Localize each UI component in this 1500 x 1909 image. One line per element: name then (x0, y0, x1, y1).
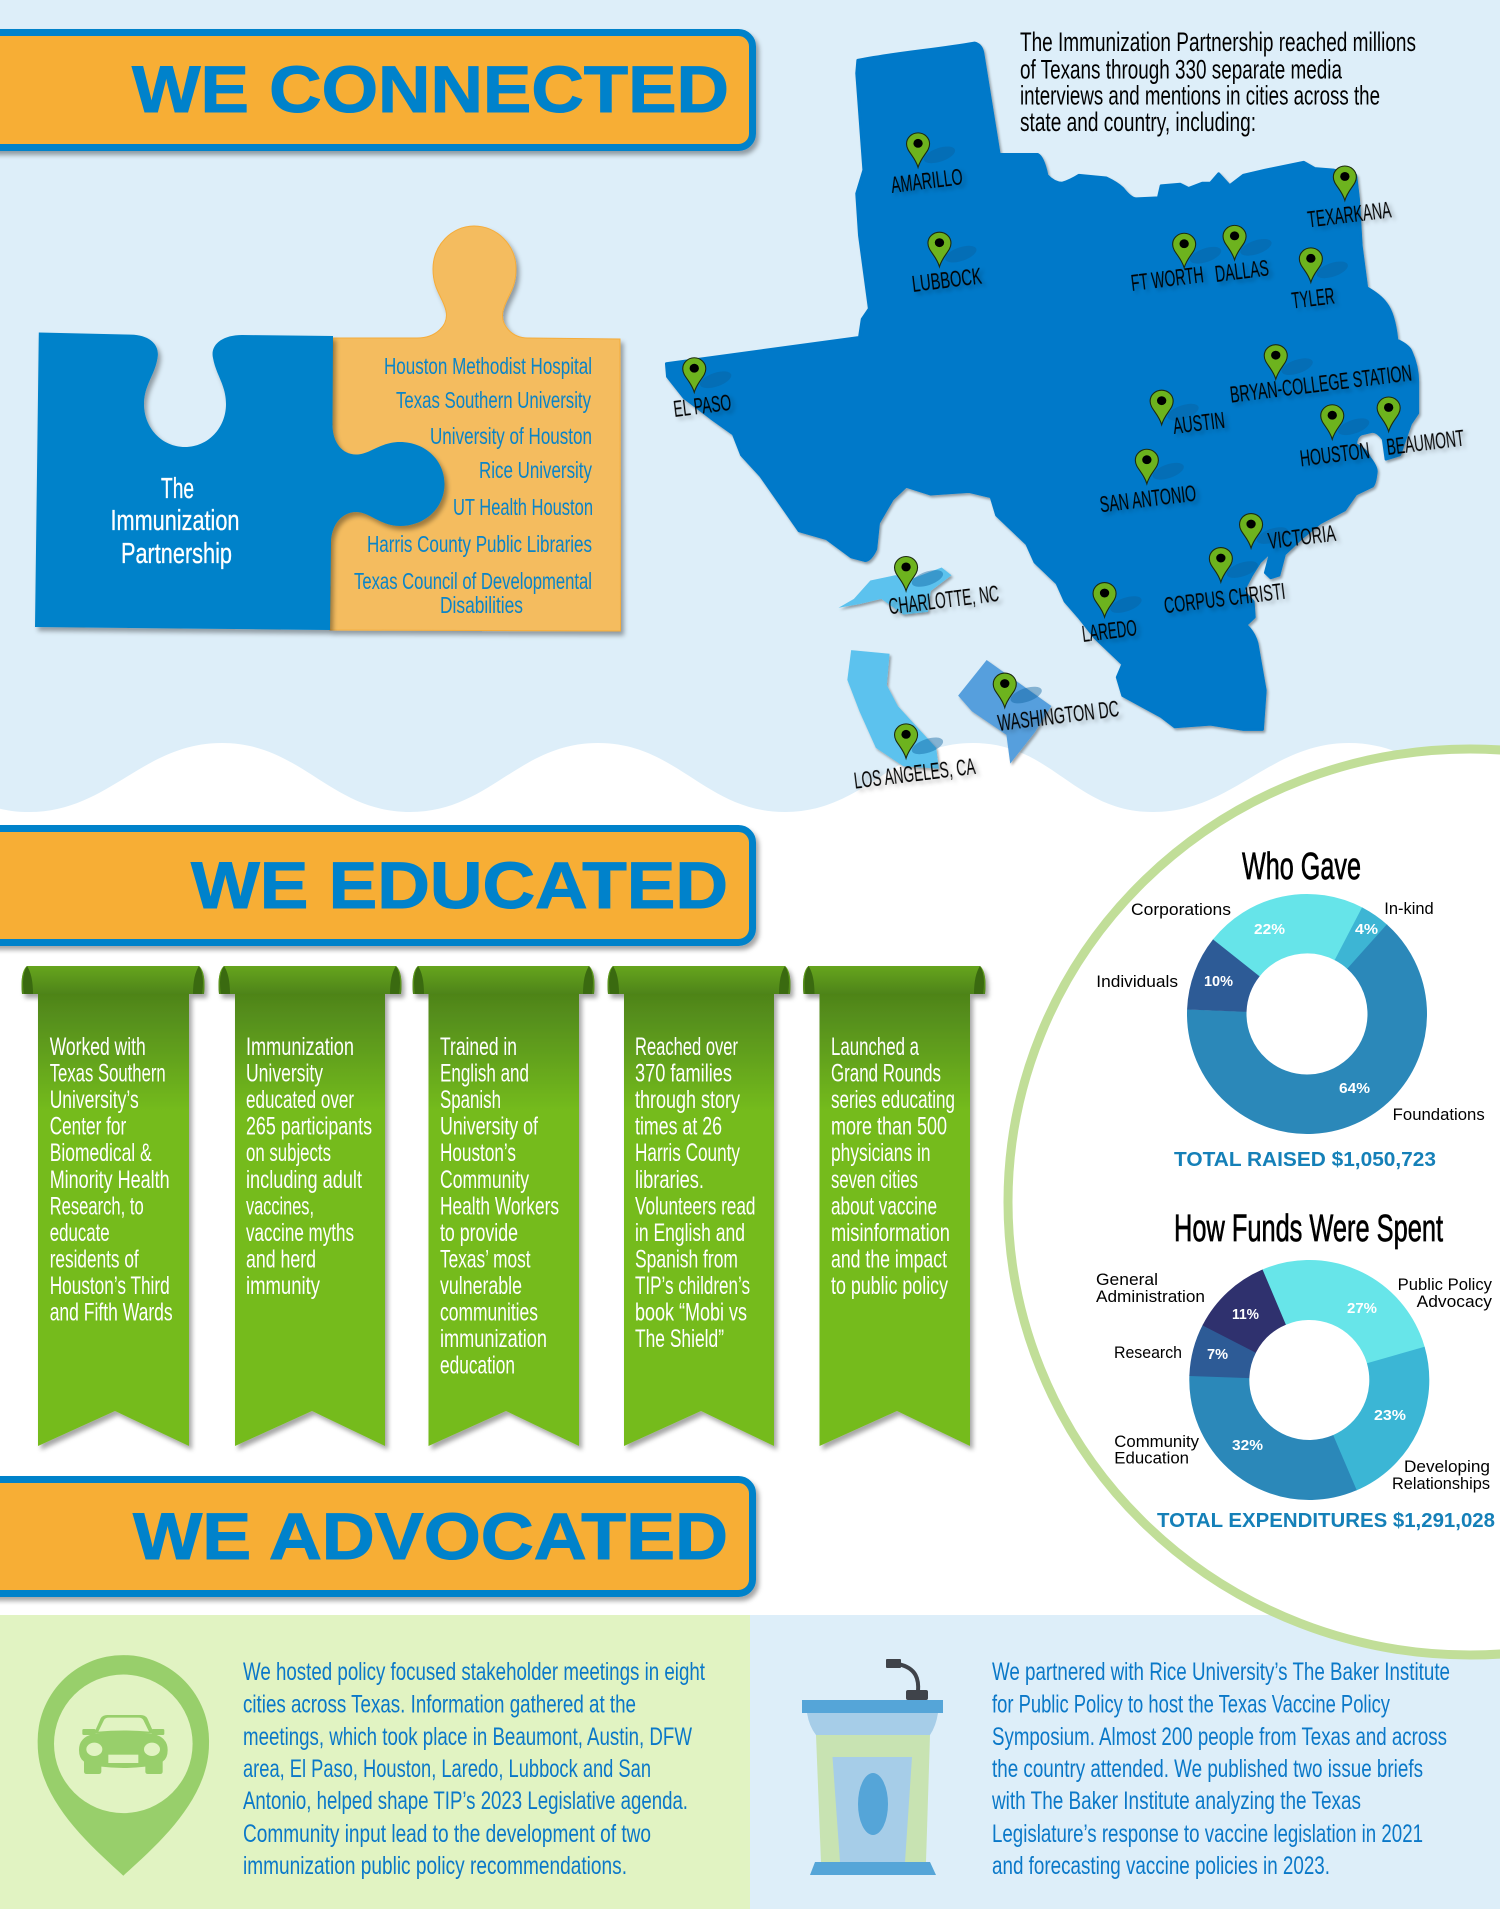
ribbon 3: Texas’ most (440, 1245, 531, 1273)
ribbon 4: 370 families (635, 1060, 732, 1088)
puzzle piece: the immunization partnership (35, 332, 444, 630)
total raised: TOTAL RAISED $1,050,723 (1174, 1148, 1436, 1171)
ribbon 3 (413, 966, 594, 1446)
ribbon 2: including adult (246, 1166, 362, 1194)
slice labels: General (1096, 1271, 1158, 1289)
partner list: Disabilities (440, 592, 523, 618)
chart title: Who Gave (1242, 846, 1361, 888)
ribbon 3: Houston’s (440, 1139, 516, 1167)
intro text: state and country, including: (1020, 107, 1256, 137)
slice labels: In-kind (1384, 900, 1434, 918)
city pin: austin: AUSTIN (1171, 407, 1226, 439)
ribbon 2 (219, 966, 401, 1446)
donut chart (1180, 887, 1434, 1141)
panel: advocated right background (750, 1615, 1500, 1909)
slice labels: Community (1114, 1433, 1200, 1451)
intro text (1020, 27, 1416, 137)
donut chart (1188, 1259, 1431, 1501)
ribbon 3: vulnerable (440, 1272, 522, 1300)
ribbon 5: misinformation (831, 1219, 950, 1247)
map: washington dc region (958, 660, 1051, 764)
city pin: ft worth: FT WORTH (1129, 261, 1205, 296)
city pin: lubbock: LUBBOCK (910, 263, 983, 297)
text: stakeholder meetings: Community input lead to the development of two (243, 1820, 651, 1848)
text: stakeholder meetings: cities across Texas. Information gathered at the (243, 1691, 636, 1719)
city pin: houston (1298, 405, 1372, 471)
ribbon 1: and Fifth Wards (50, 1298, 173, 1326)
text: stakeholder meetings (243, 1658, 705, 1880)
ribbon 3: Community (440, 1166, 529, 1194)
ribbon 5: series educating (831, 1086, 955, 1114)
slice labels: Developing (1404, 1458, 1490, 1476)
ribbon 2: immunity (246, 1272, 320, 1300)
slice labels: 32% (1232, 1437, 1263, 1454)
partner list: Houston Methodist Hospital (384, 353, 592, 379)
city pin: laredo (1080, 583, 1144, 647)
white wave section (0, 743, 1500, 1620)
slice labels: Administration (1096, 1288, 1205, 1306)
slice labels: 23% (1374, 1407, 1406, 1424)
ribbon 4: book “Mobi vs (635, 1298, 747, 1326)
ribbon 4: The Shield” (635, 1325, 724, 1353)
city pin: ft worth (1129, 233, 1223, 296)
slice labels (1096, 900, 1485, 1124)
slice labels: 4% (1355, 921, 1378, 938)
city pin: austin (1150, 390, 1226, 439)
ribbon 3: Spanish (440, 1086, 501, 1114)
total expenditures: TOTAL EXPENDITURES $1,291,028 (1157, 1509, 1495, 1532)
ribbon 4: Reached over (635, 1033, 738, 1061)
city pin: tyler: TYLER (1290, 283, 1336, 314)
partner list: Rice University (479, 457, 592, 483)
partner list: Texas Southern University (396, 387, 591, 413)
map: california (847, 650, 939, 769)
city pin: el paso (672, 358, 734, 422)
ribbon 5: Grand Rounds (831, 1060, 941, 1088)
puzzle label: Partnership (121, 538, 232, 570)
city pin: beaumont (1377, 397, 1466, 460)
city pin: los angeles ca (852, 724, 977, 794)
partner list: Harris County Public Libraries (367, 531, 592, 557)
heading: we connected: WE CONNECTED (132, 52, 729, 126)
slice labels: Advocacy (1417, 1293, 1493, 1311)
text: baker institute partnership: with The Baker Institute analyzing the Texas (991, 1787, 1361, 1815)
ribbon 3: English and (440, 1060, 529, 1088)
ribbon 2: on subjects (246, 1139, 331, 1167)
text: stakeholder meetings: meetings, which took place in Beaumont, Austin, DFW (243, 1723, 692, 1751)
partner list: UT Health Houston (453, 494, 593, 520)
text: stakeholder meetings: Antonio, helped shape TIP’s 2023 Legislative agenda. (243, 1787, 688, 1815)
slice labels: Education (1114, 1450, 1189, 1468)
city pin: corpus christi: CORPUS CHRISTI (1162, 578, 1287, 618)
city pin: san antonio: SAN ANTONIO (1098, 480, 1198, 517)
heading: we advocated: WE ADVOCATED (133, 1499, 728, 1573)
city pin: houston: HOUSTON (1298, 437, 1371, 471)
text: baker institute partnership: and forecasting vaccine policies in 2023. (992, 1852, 1330, 1880)
ribbon 1: Center for (50, 1113, 126, 1141)
icon: podium (802, 1659, 943, 1875)
partner list: Texas Council of Developmental (354, 568, 592, 594)
slice labels: 10% (1204, 973, 1233, 990)
ribbon 5: more than 500 (831, 1113, 947, 1141)
ribbon 5 (803, 966, 985, 1446)
slice labels: Relationships (1392, 1475, 1490, 1493)
city pin: san antonio (1098, 449, 1198, 517)
ribbon 1: Houston’s Third (50, 1272, 170, 1300)
ribbon 1: Worked with (50, 1033, 146, 1061)
heading: we advocated (0, 1480, 752, 1594)
slice labels: Corporations (1131, 901, 1231, 919)
chart: who gave (1096, 846, 1485, 1171)
slice labels: 64% (1339, 1080, 1370, 1097)
ribbon 4: through story (635, 1086, 740, 1114)
ribbon 2: 265 participants (246, 1113, 372, 1141)
icon: location pin with car (38, 1655, 209, 1876)
ribbon 3: Trained in (440, 1033, 517, 1061)
ribbon 3: communities (440, 1298, 538, 1326)
ribbon 2: Immunization (246, 1033, 354, 1061)
ribbon 4: Harris County (635, 1139, 740, 1167)
partner list: University of Houston (430, 423, 592, 449)
city pin: amarillo (889, 133, 964, 198)
city pin: los angeles ca: LOS ANGELES, CA (852, 753, 977, 794)
ribbon 2: educated over (246, 1086, 354, 1114)
map: texas (666, 43, 1418, 730)
slice labels (1096, 1271, 1493, 1493)
intro text: of Texans through 330 separate media (1020, 54, 1343, 84)
ribbon 2: University (246, 1060, 323, 1088)
city pin: charlotte nc (887, 556, 1000, 619)
city pin: dallas: DALLAS (1213, 255, 1270, 287)
ribbon 5: physicians in (831, 1139, 930, 1167)
ribbon 5: Launched a (831, 1033, 919, 1061)
ribbon 3: Health Workers (440, 1192, 559, 1220)
ribbon 4: in English and (635, 1219, 745, 1247)
ribbon 4 (608, 966, 790, 1446)
ribbon 2: vaccines, (246, 1192, 314, 1220)
ribbon 1: Minority Health (50, 1166, 170, 1194)
heading: we educated (0, 828, 752, 942)
ribbon 4: times at 26 (635, 1113, 722, 1141)
ribbon 2: and herd (246, 1245, 316, 1273)
city pin: washington dc: WASHINGTON DC (996, 695, 1120, 736)
city pin: el paso: EL PASO (672, 389, 733, 422)
city pin: washington dc (993, 673, 1120, 736)
chart: how funds were spent (1096, 1208, 1495, 1532)
panel: advocated left background (0, 1615, 750, 1909)
slice labels: 22% (1254, 921, 1285, 938)
ribbon 5: seven cities (831, 1166, 918, 1194)
slice labels: 27% (1347, 1300, 1377, 1317)
ribbon 1: Texas Southern (50, 1060, 166, 1088)
city pin: tyler (1290, 248, 1350, 314)
text: stakeholder meetings: immunization public policy recommendations. (243, 1852, 627, 1880)
puzzle piece: partners (330, 226, 620, 631)
ribbon 3: to provide (440, 1219, 518, 1247)
slice labels: 11% (1232, 1306, 1259, 1323)
ribbon 3: education (440, 1352, 515, 1380)
city pin: texarkana: TEXARKANA (1306, 196, 1393, 232)
puzzle label: Immunization (110, 505, 240, 537)
text: stakeholder meetings: area, El Paso, Houston, Laredo, Lubbock and San (243, 1755, 651, 1783)
ribbon 3: immunization (440, 1325, 547, 1353)
map: north carolina (839, 567, 952, 615)
city pin: laredo: LAREDO (1080, 614, 1138, 647)
ribbon 4: libraries. (635, 1166, 704, 1194)
text: stakeholder meetings: We hosted policy focused stakeholder meetings in eight (243, 1658, 705, 1686)
heading: we connected (0, 32, 752, 148)
city pin: victoria: VICTORIA (1266, 520, 1338, 554)
ribbon 1: Biomedical & (50, 1139, 152, 1167)
panel: finance circle (1008, 749, 1500, 1655)
puzzle graphic (35, 226, 620, 631)
city pin: charlotte nc: CHARLOTTE, NC (887, 580, 1000, 619)
city pin: corpus christi (1162, 548, 1287, 618)
slice labels: Public Policy (1398, 1276, 1493, 1294)
puzzle label: The (161, 473, 194, 505)
ribbon 4: Spanish from (635, 1245, 738, 1273)
ribbon 4: Volunteers read (635, 1192, 756, 1220)
slice labels: Individuals (1096, 973, 1178, 991)
city pin: victoria (1240, 514, 1338, 554)
city pin: lubbock (910, 232, 983, 297)
city pin: amarillo: AMARILLO (889, 163, 964, 198)
ribbon 1: University’s (50, 1086, 139, 1114)
ribbon 1: residents of (50, 1245, 139, 1273)
heading: we educated: WE EDUCATED (191, 848, 728, 922)
ribbon 1: educate (50, 1219, 110, 1247)
partner list (354, 353, 593, 618)
city pin: bryan-college station (1228, 345, 1413, 408)
ribbon 4: TIP’s children’s (635, 1272, 750, 1300)
ribbon 5: about vaccine (831, 1192, 937, 1220)
slice labels: Research (1114, 1344, 1182, 1362)
ribbon 1 (22, 966, 204, 1446)
ribbon 3: University of (440, 1113, 538, 1141)
slice labels: Foundations (1393, 1106, 1485, 1124)
ribbon 1: Research, to (50, 1192, 144, 1220)
city pin: texarkana (1306, 166, 1393, 232)
ribbon 2: vaccine myths (246, 1219, 354, 1247)
ribbon 5: and the impact (831, 1245, 947, 1273)
slice labels: 7% (1207, 1346, 1228, 1363)
city pin: dallas (1213, 225, 1274, 287)
ribbon 5: to public policy (831, 1272, 948, 1300)
puzzle label (110, 473, 240, 570)
text: baker institute partnership (991, 1658, 1450, 1880)
